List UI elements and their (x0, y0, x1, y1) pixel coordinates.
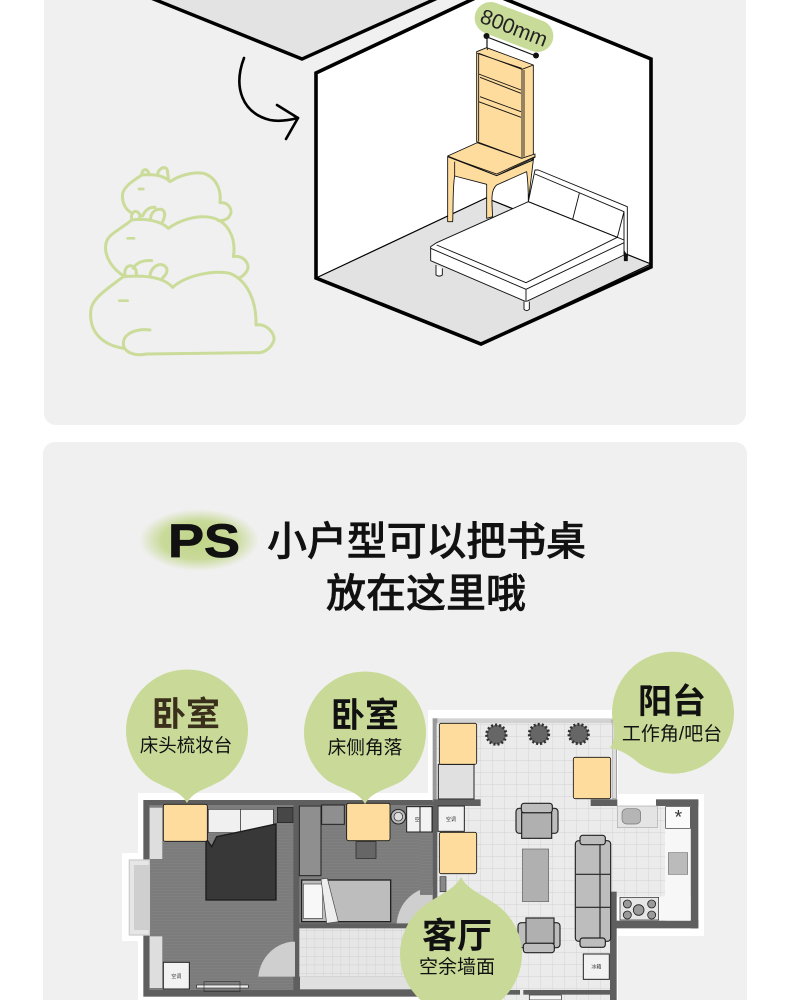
heading line 2: 放在这里哦 (326, 572, 526, 616)
floor plan (122, 710, 704, 1000)
callout: living room: 客厅 (422, 917, 492, 956)
floor plan: bedrooms (129, 800, 435, 997)
floor plan: bedrooms: 空调 (415, 816, 425, 823)
floor plan: living room, balcony and kitchen: * (675, 808, 683, 829)
panel: room illustration (44, 0, 746, 425)
room floor (316, 198, 651, 344)
bed (431, 170, 627, 311)
callout: living room (400, 877, 522, 1000)
mascot: stacked capybaras (91, 168, 274, 355)
callout: bedroom corner: 卧室 (331, 697, 399, 735)
callout: bedroom corner (304, 672, 426, 804)
armchairs, table, sofa (516, 803, 611, 953)
callout: balcony: 工作角/吧台 (622, 723, 722, 745)
callout: bedroom headboard: 床头梳妆台 (140, 735, 232, 756)
dimension: 800mm: 800mm (477, 5, 551, 52)
heading line 1: 小户型可以把书桌 (267, 520, 586, 564)
glow behind PS (139, 509, 259, 571)
ceiling piece (146, 0, 442, 59)
heading: PS: PS (168, 514, 240, 567)
callout: living room: 空余墙面 (419, 956, 495, 978)
floor plan: living room, balcony and kitchen (420, 718, 698, 1000)
panel: floor plan suggestions (43, 442, 747, 1000)
callout: balcony (610, 652, 734, 774)
floor plan: living room, balcony and kitchen: 冰箱 (591, 964, 601, 971)
callout: bedroom headboard (126, 670, 248, 803)
arrow (239, 58, 298, 139)
callout: balcony: 阳台 (638, 683, 706, 721)
callout: bedroom headboard: 卧室 (152, 696, 220, 734)
floor plan: white backing (122, 710, 704, 1000)
room cutaway (316, 0, 651, 344)
dimension: 800mm (470, 0, 558, 58)
desk and bookshelf (448, 48, 535, 222)
floor plan: living room, balcony and kitchen: 空调 (446, 816, 456, 823)
floor plan: bedrooms: 空调 (171, 973, 181, 980)
callout: bedroom corner: 床侧角落 (328, 737, 403, 758)
plants (487, 724, 588, 744)
